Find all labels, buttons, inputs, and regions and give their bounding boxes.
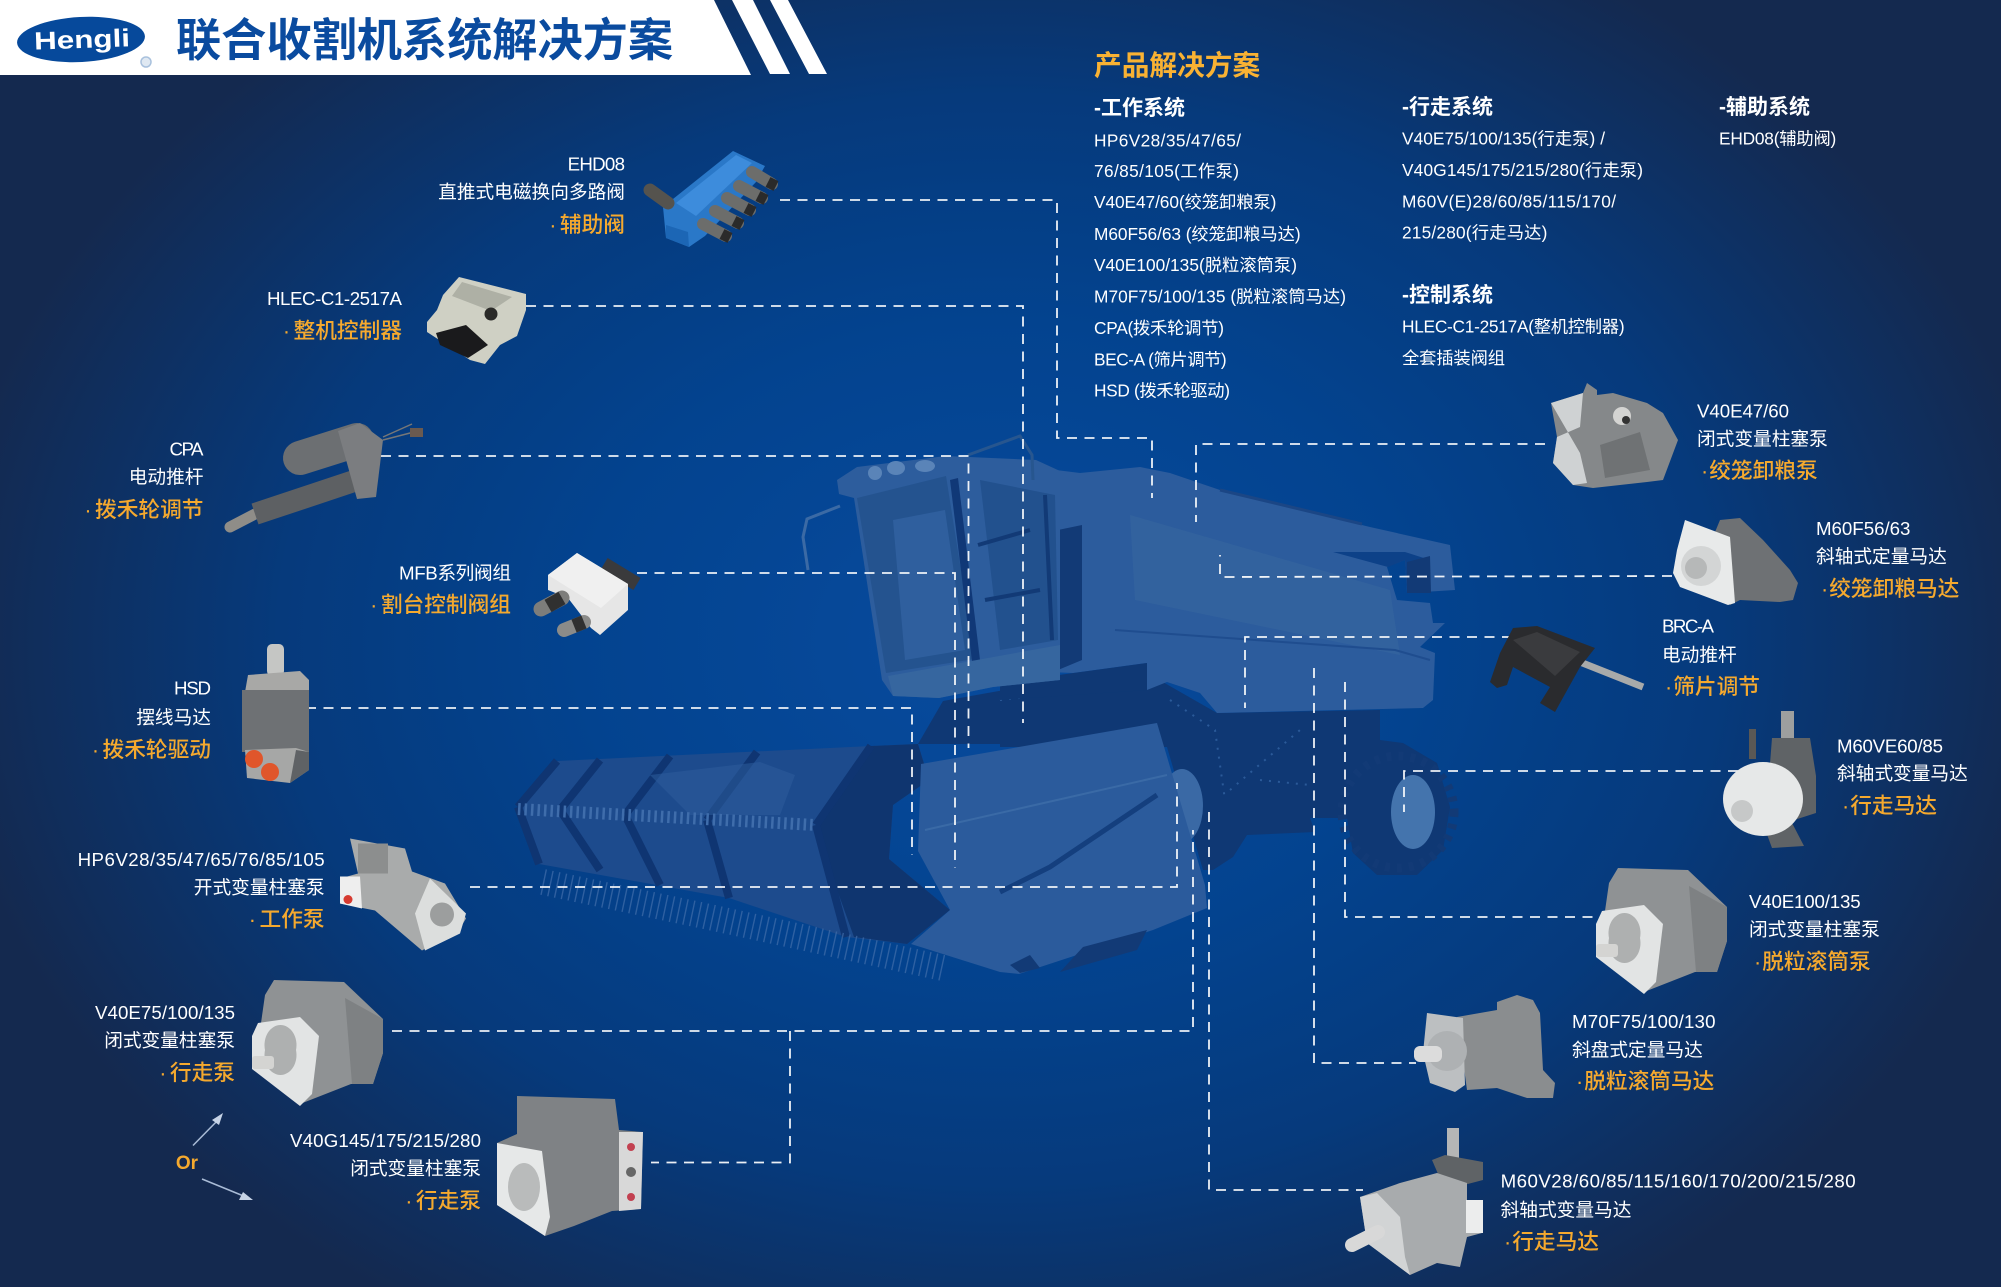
label: EHD08: ·辅助阀 bbox=[549, 212, 625, 237]
label: M60F56/63: ·绞笼卸粮马达 bbox=[1821, 576, 1959, 601]
label: M70F75/100/130: 斜盘式定量马达 bbox=[1572, 1040, 1703, 1060]
label: V40E100/135: V40E100/135 bbox=[1749, 891, 1861, 912]
connector: HSD bbox=[306, 708, 912, 855]
column: auxiliary system bbox=[1719, 95, 1836, 148]
label: EHD08: 直推式电磁换向多路阀 bbox=[438, 182, 625, 202]
label: V40G: V40G145/175/215/280 bbox=[290, 1130, 481, 1151]
label: BRC-A: BRC-A bbox=[1662, 616, 1715, 636]
combine: feeder house bbox=[911, 723, 1207, 974]
label: BRC-A: ·筛片调节 bbox=[1665, 674, 1760, 699]
header band bbox=[0, 0, 827, 75]
panel heading: 产品解决方案 bbox=[1094, 50, 1260, 81]
connector: CPA bbox=[381, 456, 968, 748]
column: work system bbox=[1094, 96, 1346, 400]
column: drive system: V40G145/175/215/280(行走泵) bbox=[1402, 160, 1643, 180]
label: M60VE60/85: 斜轴式变量马达 bbox=[1837, 763, 1968, 784]
label: BRC-A bbox=[1662, 616, 1760, 699]
column: work system: M70F75/100/135 (脱粒滚筒马达) bbox=[1094, 286, 1346, 306]
label: HSD: ·拨禾轮驱动 bbox=[92, 737, 211, 762]
connector: HLEC-C1-2517A bbox=[526, 306, 1023, 723]
label: CPA: CPA bbox=[170, 438, 204, 460]
label: HLEC-C1-2517A bbox=[267, 288, 403, 343]
label: EHD08: EHD08 bbox=[568, 154, 625, 174]
label: V40E47/60: ·绞笼卸粮泵 bbox=[1701, 458, 1818, 483]
title: 联合收割机系统解决方案 bbox=[176, 15, 673, 66]
connector: EHD08 bbox=[780, 200, 1152, 498]
connector: M60V28 bbox=[1209, 812, 1363, 1190]
label: HP6V: ·工作泵 bbox=[249, 906, 325, 932]
label: M70F75/100/130: M70F75/100/130 bbox=[1572, 1011, 1716, 1032]
label: V40E47/60: V40E47/60 bbox=[1697, 400, 1789, 422]
connector: V40E47/60 bbox=[1196, 444, 1545, 522]
connector: HP6V bbox=[470, 783, 1177, 887]
label: V40E75: 闭式变量柱塞泵 bbox=[104, 1030, 235, 1051]
label: MFB: MFB系列阀组 bbox=[399, 562, 511, 584]
icon: V40G pump bbox=[497, 1096, 643, 1236]
column: work system: M60F56/63 (绞笼卸粮马达) bbox=[1094, 224, 1301, 244]
label: HSD bbox=[92, 678, 211, 762]
label: MFB: ·割台控制阀组 bbox=[370, 592, 511, 617]
connector: M60F56/63 bbox=[1220, 555, 1672, 577]
arrow: down to V40G bbox=[202, 1179, 253, 1200]
column: work system: V40E47/60(绞笼卸粮泵) bbox=[1094, 192, 1276, 212]
label: M60V28: M60V28/60/85/115/160/170/200/215/280 bbox=[1501, 1170, 1856, 1192]
label: HLEC-C1-2517A: ·整机控制器 bbox=[283, 318, 402, 343]
label: V40G bbox=[290, 1130, 481, 1213]
icon: V40E75 pump bbox=[252, 980, 383, 1106]
column: control system: HLEC-C1-2517A(整机控制器) bbox=[1402, 316, 1625, 336]
logo: Hengli bbox=[34, 24, 130, 56]
icon: controller bbox=[427, 277, 526, 364]
label: M60VE60/85: ·行走马达 bbox=[1842, 793, 1937, 818]
column: work system: BEC-A (筛片调节) bbox=[1094, 350, 1227, 370]
connector: V40E100 bbox=[1345, 682, 1600, 917]
column: drive system: 215/280(行走马达) bbox=[1402, 222, 1547, 242]
label: V40G: 闭式变量柱塞泵 bbox=[350, 1158, 481, 1179]
combine: wheel hubs bbox=[1161, 769, 1203, 843]
label: EHD08 bbox=[438, 154, 625, 237]
label: HSD: 摆线马达 bbox=[136, 707, 211, 728]
combine: cutting header bbox=[518, 744, 950, 944]
label: M60VE60/85 bbox=[1837, 736, 1968, 818]
column: auxiliary system: -辅助系统 bbox=[1719, 95, 1810, 119]
column: work system: 76/85/105(工作泵) bbox=[1094, 161, 1239, 181]
icon: HSD motor bbox=[242, 644, 309, 783]
label: HP6V: 开式变量柱塞泵 bbox=[194, 877, 325, 898]
column: work system: -工作系统 bbox=[1094, 96, 1185, 120]
label: M60VE60/85: M60VE60/85 bbox=[1837, 736, 1943, 756]
connector: V40E75 and V40G bbox=[392, 830, 1193, 1162]
label: CPA: 电动推杆 bbox=[129, 466, 204, 488]
column: control system bbox=[1402, 283, 1625, 368]
icon: MFB valve block bbox=[541, 553, 637, 635]
icon: M60F motor bbox=[1673, 518, 1798, 605]
icon: V40E100 pump bbox=[1596, 868, 1727, 994]
column: drive system: -行走系统 bbox=[1402, 95, 1493, 119]
icon: M60V motor bbox=[1352, 1128, 1483, 1275]
label: V40E100/135: 闭式变量柱塞泵 bbox=[1749, 919, 1880, 940]
label: CPA: ·拨禾轮调节 bbox=[84, 497, 204, 522]
logo bbox=[16, 14, 151, 67]
icon: EHD08 valve bbox=[650, 151, 776, 247]
icon: M60VE motor bbox=[1723, 711, 1816, 848]
label: HP6V: HP6V28/35/47/65/76/85/105 bbox=[78, 849, 325, 870]
label: M60V28: 斜轴式变量马达 bbox=[1501, 1200, 1632, 1220]
icon: BRC-A actuator bbox=[1490, 626, 1643, 712]
combine harvester silhouette bbox=[518, 436, 1455, 974]
column: control system: -控制系统 bbox=[1402, 283, 1493, 307]
icon: CPA electric actuator bbox=[230, 423, 423, 527]
connector: MFB bbox=[637, 573, 955, 868]
label: M60V28: ·行走马达 bbox=[1504, 1229, 1599, 1254]
combine: cab bbox=[837, 456, 1060, 698]
column: work system: V40E100/135(脱粒滚筒泵) bbox=[1094, 255, 1297, 275]
label: V40E47/60: 闭式变量柱塞泵 bbox=[1697, 428, 1828, 450]
column: drive system: M60V(E)28/60/85/115/170/ bbox=[1402, 192, 1616, 212]
label: HP6V bbox=[78, 849, 325, 932]
label: or: Or bbox=[176, 1153, 199, 1174]
connector: M70F bbox=[1314, 668, 1416, 1063]
icon: HP6V pump bbox=[340, 838, 466, 950]
column: work system: HSD (拨禾轮驱动) bbox=[1094, 380, 1230, 400]
label: BRC-A: 电动推杆 bbox=[1662, 644, 1737, 666]
combine: body and grain tank bbox=[1000, 463, 1455, 713]
column: control system: 全套插装阀组 bbox=[1402, 348, 1505, 368]
label: M70F75/100/130 bbox=[1572, 1011, 1716, 1094]
label: HSD: HSD bbox=[174, 678, 211, 698]
label: M70F75/100/130: ·脱粒滚筒马达 bbox=[1576, 1068, 1714, 1094]
connector: BRC-A bbox=[1245, 637, 1512, 708]
column: auxiliary system: EHD08(辅助阀) bbox=[1719, 128, 1836, 148]
label: V40E75: ·行走泵 bbox=[159, 1060, 235, 1085]
combine: chassis and wheels bbox=[918, 673, 1450, 875]
icon: M70F motor bbox=[1414, 995, 1555, 1098]
icon: V40E47 pump bbox=[1551, 383, 1678, 488]
label: CPA bbox=[84, 438, 204, 522]
label: HLEC-C1-2517A: HLEC-C1-2517A bbox=[267, 288, 403, 309]
label: V40E100/135: ·脱粒滚筒泵 bbox=[1754, 949, 1871, 974]
column: work system: HP6V28/35/47/65/ bbox=[1094, 130, 1241, 150]
arrow: up to V40E75 bbox=[193, 1113, 223, 1146]
label: M60V28 bbox=[1501, 1170, 1856, 1254]
label: V40E75: V40E75/100/135 bbox=[95, 1002, 235, 1023]
label: MFB bbox=[370, 562, 511, 617]
column: work system: CPA(拨禾轮调节) bbox=[1094, 318, 1224, 338]
label: V40G: ·行走泵 bbox=[405, 1188, 481, 1213]
label: V40E100/135 bbox=[1749, 891, 1880, 974]
column: drive system: V40E75/100/135(行走泵) / bbox=[1402, 128, 1605, 148]
label: M60F56/63: M60F56/63 bbox=[1816, 518, 1910, 539]
label: V40E47/60 bbox=[1697, 400, 1828, 483]
column: drive system bbox=[1402, 95, 1643, 242]
connector: M60VE bbox=[1404, 771, 1738, 812]
label: V40E75 bbox=[95, 1002, 235, 1085]
label: M60F56/63: 斜轴式定量马达 bbox=[1816, 546, 1947, 567]
panel: product solutions bbox=[1094, 50, 1836, 400]
label: M60F56/63 bbox=[1816, 518, 1959, 601]
